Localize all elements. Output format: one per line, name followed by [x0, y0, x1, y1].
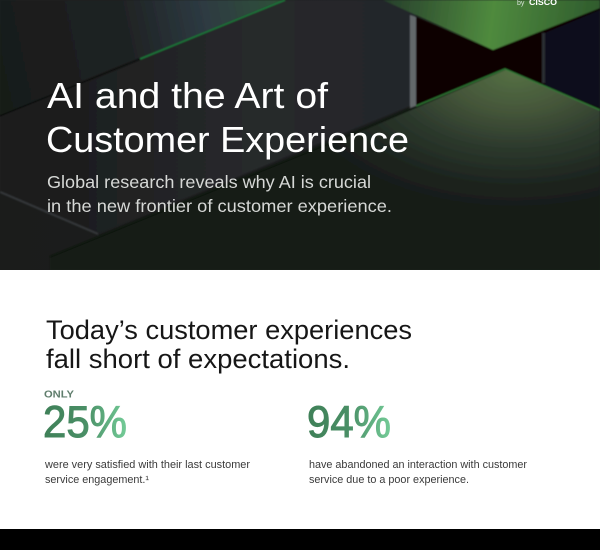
description: have abandoned an interaction with customer — [309, 459, 527, 471]
section heading: Today’s customer experiences — [46, 315, 412, 345]
title — [46, 75, 409, 160]
logo: by cisco: by — [517, 0, 525, 7]
logo: by cisco — [517, 0, 557, 7]
stat: 25 percent satisfied — [43, 390, 250, 486]
section heading: fall short of expectations. — [46, 344, 350, 374]
number: 94%: 94% — [307, 398, 391, 447]
description: were very satisfied with their last customer — [44, 459, 250, 471]
bottom black band — [0, 529, 600, 550]
title: AI and the Art of — [47, 75, 329, 116]
description line 2: service due to a poor experience. — [309, 474, 469, 486]
title: Customer Experience — [46, 119, 409, 160]
description line 2: service engagement.¹ — [45, 474, 149, 486]
white content panel — [0, 270, 600, 529]
subtitle: Global research reveals why AI is crucial — [47, 172, 371, 192]
section heading — [46, 315, 412, 374]
label: only: ONLY — [44, 390, 74, 400]
number: 25%: 25% — [43, 398, 127, 447]
subtitle: in the new frontier of customer experience. — [47, 196, 392, 216]
stat: 94 percent abandoned — [307, 398, 527, 486]
hero background image — [0, 0, 600, 270]
subtitle — [47, 172, 392, 216]
